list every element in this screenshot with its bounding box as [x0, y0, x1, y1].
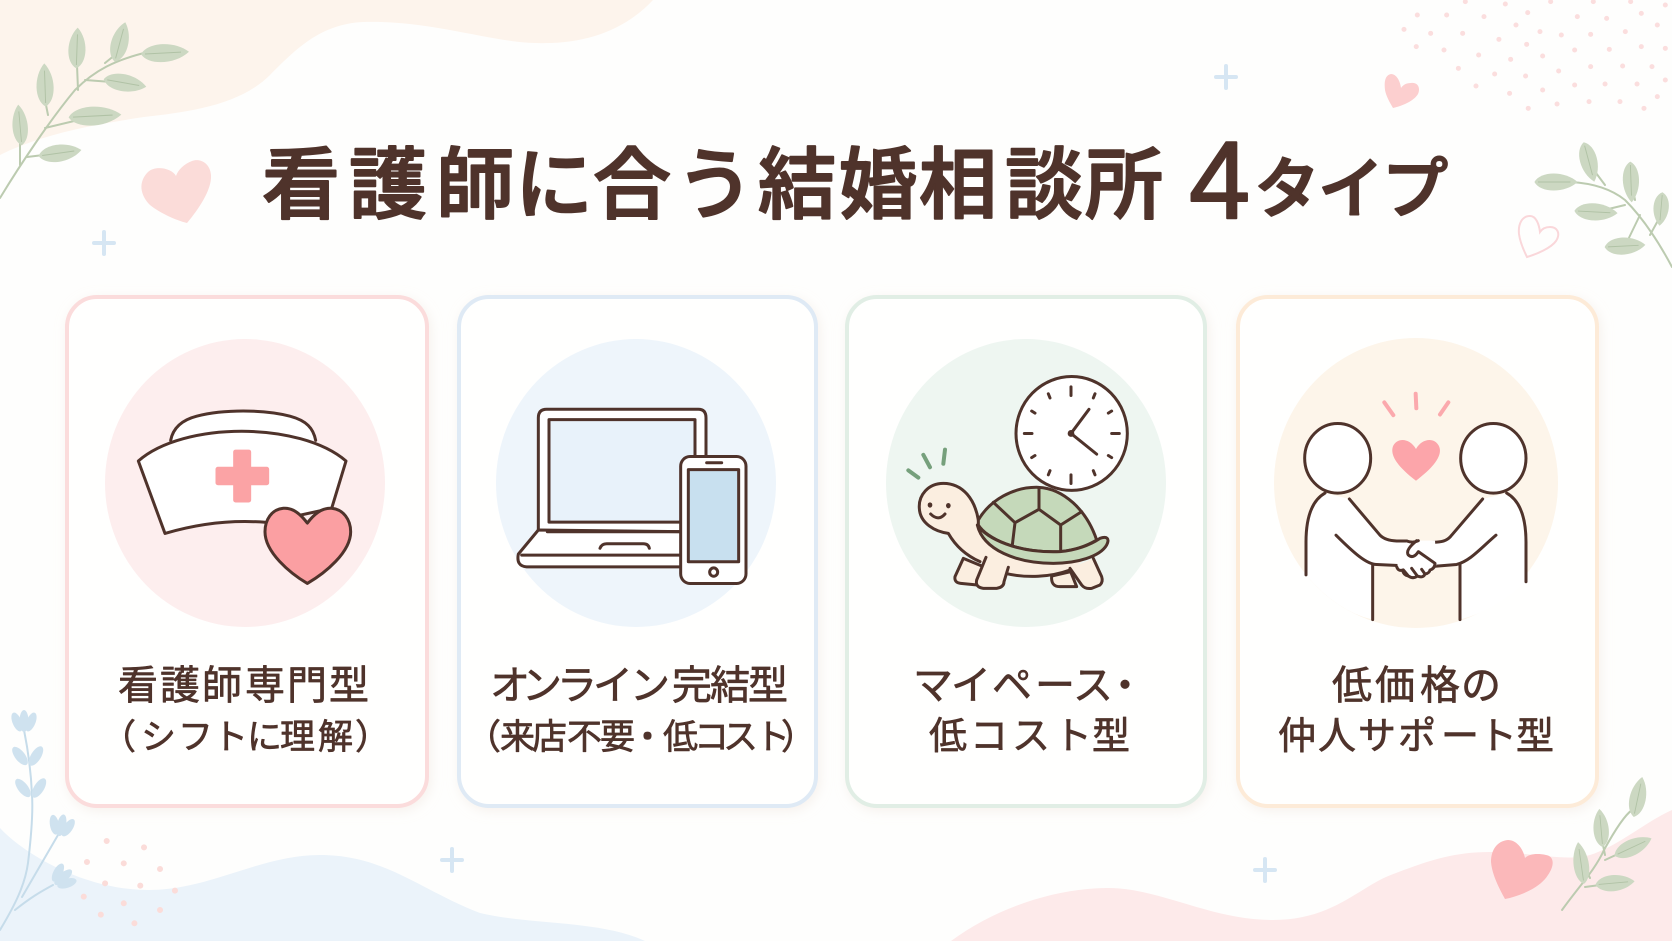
dots: bottom-left pattern [84, 841, 175, 923]
panel: オンライン完結型 [459, 297, 816, 806]
leaf branch: top-right [1534, 140, 1672, 267]
heart: top-left large [141, 160, 211, 223]
panel: 低価格の仲人サポート型 [1238, 297, 1597, 806]
leaf branch: bottom-right [1562, 775, 1655, 910]
card label [1278, 664, 1554, 758]
card frame [459, 297, 816, 806]
card frame [1238, 297, 1597, 806]
card frame [847, 297, 1205, 806]
card frame [67, 297, 427, 806]
icon circle [105, 339, 385, 627]
title [262, 119, 1448, 242]
background blob: bottom-right pink [951, 810, 1672, 941]
icon circle [1274, 338, 1558, 628]
heart: top-right small [1385, 74, 1419, 108]
panel: マイペース・低コスト型 [847, 297, 1205, 806]
card label: 仲人サポート型 [1278, 716, 1554, 758]
card label [466, 664, 816, 757]
flower branch: bottom-left [0, 710, 81, 930]
icon: laptop and smartphone [518, 409, 746, 583]
icon: turtle [919, 483, 1108, 589]
title: タイプ [1254, 152, 1448, 226]
icon: nurse cap with heart [138, 411, 351, 583]
panel: 看護師専門型 [67, 297, 427, 806]
heart: top-right outline [1519, 216, 1558, 257]
plus decorations [94, 66, 1275, 881]
heart: bottom-right [1491, 840, 1553, 899]
card label: （シフトに理解） [101, 718, 390, 757]
card label [913, 664, 1145, 758]
card label: 低コスト型 [929, 716, 1130, 758]
icon: handshake [1397, 541, 1437, 578]
card label: 低価格の [1332, 664, 1501, 708]
icon: motion ticks [908, 450, 945, 478]
title: 看護師に合う結婚相談所 [262, 141, 1163, 229]
card label [101, 664, 390, 757]
icon: two people and heart [1305, 394, 1526, 620]
background blob: top-left peach [0, 0, 653, 155]
icon circle [496, 339, 776, 627]
background blob: bottom-left blue [0, 828, 645, 941]
card label: 看護師専門型 [118, 664, 369, 708]
dots: top-right pattern [1404, 2, 1665, 108]
icon: clock [1016, 377, 1127, 490]
title: 4 [1189, 119, 1250, 242]
leaf branch: top-left [0, 20, 189, 198]
card label: オンライン完結型 [490, 664, 788, 708]
card label: （来店不要・低コスト） [466, 718, 816, 757]
icon circle [886, 339, 1166, 627]
card label: マイペース・ [913, 664, 1145, 708]
